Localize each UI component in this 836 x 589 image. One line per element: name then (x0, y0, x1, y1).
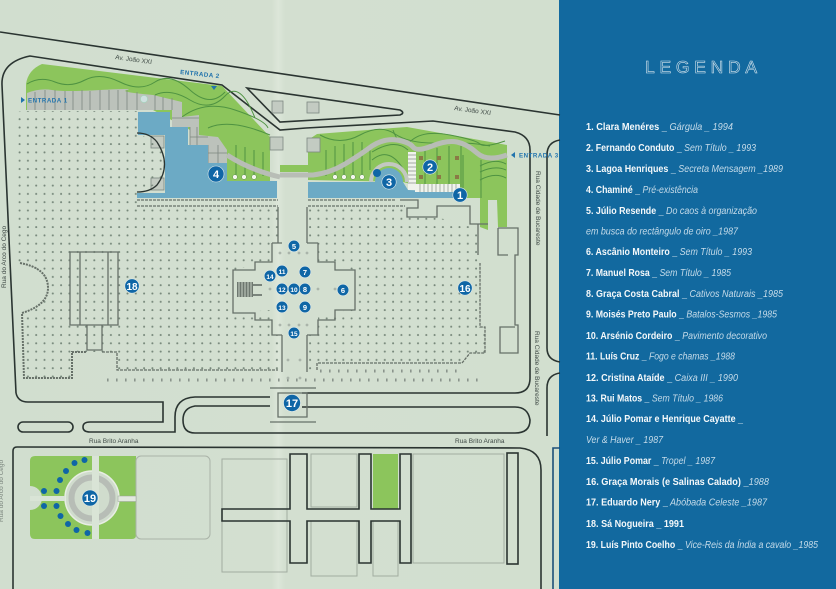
marker numbers: 6 (341, 286, 345, 295)
garden: north-east green area (280, 127, 507, 230)
marker numbers: 17 (286, 398, 298, 410)
legend list: 19. Luís Pinto Coelho _ Vice-Reis da Índia a cavalo _1985 (586, 540, 818, 551)
marker numbers: 4 (213, 169, 220, 181)
street labels: Av. João XXI (454, 105, 492, 117)
legend list: 18. Sá Nogueira _ 1991 (586, 519, 684, 530)
marker numbers: 16 (459, 284, 471, 295)
legend heading: LEGENDA (645, 57, 757, 77)
legend list: 5. Júlio Resende _ Do caos à organização (586, 206, 757, 217)
marker numbers: 2 (427, 162, 433, 174)
marker numbers: 9 (303, 303, 307, 312)
plaza: east dotted paving (307, 208, 485, 370)
legend list: 15. Júlio Pomar _ Tropel _ 1987 (586, 456, 715, 467)
street labels: Av. João XXI (115, 54, 153, 66)
marker numbers: 11 (279, 269, 286, 276)
street labels: Rua do Arco do Cego (1, 225, 8, 288)
marker numbers: 7 (303, 268, 307, 277)
legend list: 8. Graça Costa Cabral _ Cativos Naturais _1985 (586, 289, 784, 300)
legend list (586, 122, 818, 551)
entrance labels (21, 69, 559, 160)
legend list: 7. Manuel Rosa _ Sem Título _ 1985 (586, 268, 731, 279)
legend list: 14. Júlio Pomar e Henrique Cayatte _ (586, 414, 743, 425)
street labels: Rua Cidade de Bucareste (533, 331, 540, 406)
small pavilions (151, 101, 320, 190)
arcades and walls (20, 133, 518, 422)
legend list: 6. Ascânio Monteiro _ Sem Título _ 1993 (586, 247, 752, 258)
legend list: Ver & Haver _ 1987 (586, 435, 663, 446)
paved path west (227, 155, 280, 177)
entrance labels: ENTRADA 2 (180, 69, 220, 80)
entrance labels: ENTRADA 1 (28, 98, 68, 104)
street labels (0, 54, 541, 522)
panel: legend background (559, 0, 836, 589)
marker numbers: 3 (386, 177, 392, 189)
marker numbers: 12 (278, 287, 286, 294)
street labels: Rua Brito Aranha (89, 438, 139, 445)
plaza: west dotted paving (13, 111, 282, 378)
street labels: Rua Cidade de Bucareste (534, 171, 541, 246)
legend list: 2. Fernando Conduto _ Sem Título _ 1993 (586, 143, 756, 154)
legend list: 16. Graça Morais (e Salinas Calado) _1988 (586, 477, 770, 488)
column marks in the central hall (269, 252, 336, 379)
marker numbers: 14 (266, 274, 274, 281)
legend list: 4. Chaminé _ Pré-existência (586, 185, 698, 196)
row of small markers (107, 371, 480, 380)
marker numbers: 19 (84, 493, 96, 505)
road network (0, 32, 560, 589)
legend list: 3. Lagoa Henriques _ Secreta Mensagem _1989 (586, 164, 783, 175)
marker numbers: 15 (290, 331, 298, 338)
winding paved path (280, 140, 507, 175)
numbered map markers (82, 160, 472, 506)
entrance labels: ENTRADA 3 (519, 152, 559, 160)
marker numbers: 8 (303, 285, 307, 294)
legend list: 9. Moisés Preto Paulo _ Batalos-Sesmos _1985 (586, 310, 777, 320)
legend list: em busca do rectângulo de oiro _1987 (586, 226, 738, 238)
legend list: 12. Cristina Ataíde _ Caixa III _ 1990 (586, 373, 739, 384)
stairs (408, 152, 460, 192)
marker numbers: 1 (457, 190, 463, 202)
garden ornaments (233, 156, 459, 182)
marker numbers: 18 (126, 282, 138, 293)
water basin west (137, 112, 277, 198)
marker numbers: 13 (278, 305, 286, 312)
hall stairs (237, 282, 262, 297)
legend list: 10. Arsénio Cordeiro _ Pavimento decorativo (586, 331, 767, 342)
garden 19 (30, 456, 210, 539)
water basin east (308, 182, 462, 198)
garden: north-west green area (26, 64, 270, 181)
legend list: 11. Luís Cruz _ Fogo e chamas _1988 (586, 352, 735, 362)
legend list: 1. Clara Menéres _ Gárgula _ 1994 (586, 122, 734, 133)
legend list: 13. Rui Matos _ Sem Título _ 1986 (586, 394, 723, 404)
legend list: 17. Eduardo Nery _ Abóbada Celeste _1987 (586, 498, 767, 508)
street labels: Rua Brito Aranha (455, 438, 505, 445)
city blocks (222, 453, 518, 576)
marker numbers: 10 (290, 287, 298, 294)
marker numbers (84, 162, 471, 505)
marker numbers: 5 (292, 242, 296, 251)
paved steps north-west (27, 89, 227, 163)
